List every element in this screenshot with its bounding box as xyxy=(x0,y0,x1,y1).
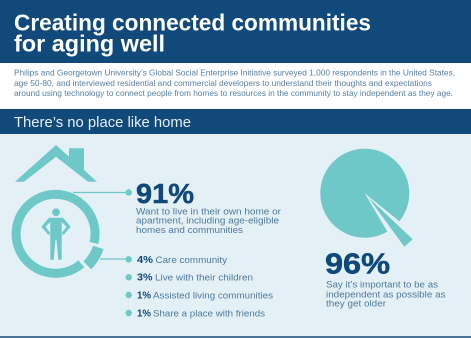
text: 91% description: Want to live in their own home or xyxy=(136,206,282,217)
connector: 91% xyxy=(73,189,132,196)
title banner: for aging well xyxy=(14,31,165,57)
item: care community: Care community xyxy=(156,255,227,266)
item: live with children: 3% xyxy=(137,272,153,284)
intro text: age 50-80, and interviewed residential and commercial developers to understand their thoughts and expectations xyxy=(14,78,432,88)
panel: home statistics xyxy=(0,134,471,338)
icon: house roof xyxy=(15,145,97,182)
text: 91% description: apartment, including age-eligible xyxy=(136,216,279,227)
stat: 96%: 96% xyxy=(325,248,390,280)
section heading band: There’s no place like home xyxy=(14,115,191,131)
pie chart: 96% xyxy=(320,149,413,247)
text: 91% description xyxy=(136,206,282,236)
item: share with friends: 1% xyxy=(137,307,152,319)
connector: 4% xyxy=(100,256,132,262)
title banner xyxy=(0,0,471,63)
item: assisted living: Assisted living communities xyxy=(153,290,273,302)
intro text: around using technology to connect people from homes to resources in the community to stay independent as they age. xyxy=(14,88,453,98)
item: live with children: Live with their children xyxy=(155,273,253,284)
item: share with friends: Share a place with friends xyxy=(153,308,265,319)
list: other living options xyxy=(126,254,273,319)
text: 96% description: Say it’s important to be as xyxy=(326,280,438,291)
item: care community: 4% xyxy=(137,254,154,266)
text: 96% description xyxy=(326,280,446,310)
section heading band xyxy=(0,109,471,134)
item: assisted living: 1% xyxy=(137,290,152,302)
text: 91% description: homes and communities xyxy=(136,225,243,236)
text: 96% description: they get older xyxy=(326,299,387,310)
item: live with children xyxy=(126,272,253,284)
intro text: Philips and Georgetown University’s Global Social Enterprise Initiative surveyed 1,000 respondents in the United States, xyxy=(14,68,455,78)
title banner: Creating connected communities xyxy=(14,10,371,36)
stat: 91%: 91% xyxy=(136,178,194,209)
intro text xyxy=(14,68,455,98)
text: 96% description: independent as possible as xyxy=(326,289,446,300)
icon: ring with person xyxy=(16,194,98,273)
